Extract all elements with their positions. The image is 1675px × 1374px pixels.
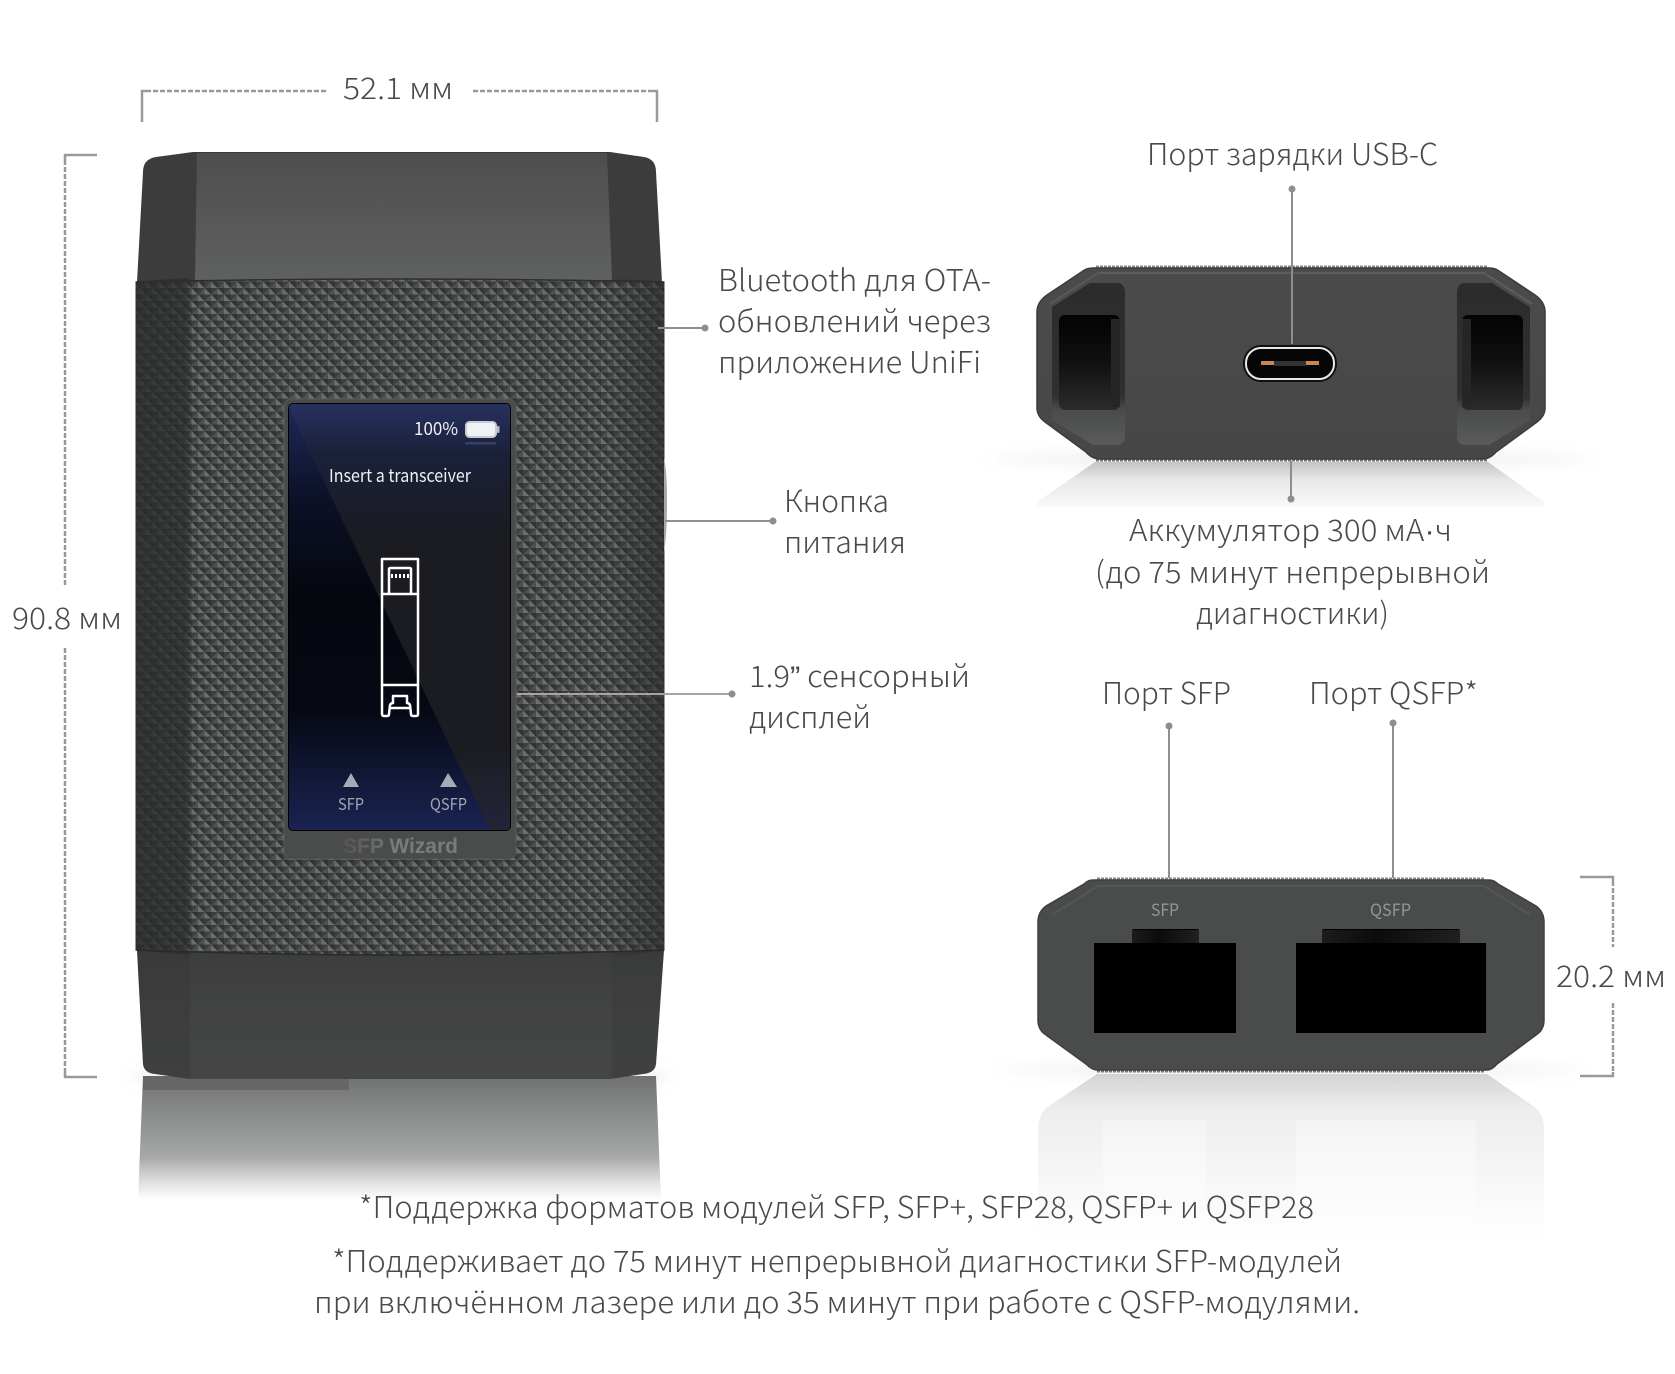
reflection [991, 456, 1591, 507]
callout: SFP port [1102, 669, 1231, 878]
callout: Bluetooth: приложение UniFi [718, 338, 981, 382]
callout: USB-C charging port [1147, 130, 1438, 344]
SFP arrow label [338, 773, 364, 815]
callout: QSFP port [1309, 669, 1478, 878]
battery status [414, 415, 500, 444]
panel: bottom edge view with USB-C [991, 267, 1591, 507]
QSFP arrow label [430, 773, 467, 815]
footnotes: *Поддерживает до 75 минут непрерывной диагностики SFP-модулей [332, 1237, 1342, 1281]
dimension: height 90.8 мм: 90.8 мм [12, 594, 122, 638]
prompt text: Insert a transceiver [329, 462, 472, 488]
bevel highlight [1098, 273, 1532, 304]
panel: main device front view [130, 152, 670, 1200]
callout: USB-C charging port: Порт зарядки USB-C [1147, 130, 1438, 174]
display bezel [284, 399, 516, 859]
footnotes: *Поддержка форматов модулей SFP, SFP+, SFP28, QSFP+ и QSFP28 [359, 1183, 1314, 1227]
battery status: 100% [414, 415, 458, 441]
top cap [137, 152, 662, 282]
callout: battery: Аккумулятор 300 мА ·ч [1129, 506, 1452, 550]
callout: SFP port: Порт SFP [1102, 669, 1231, 713]
callout: QSFP port: Порт QSFP* [1309, 669, 1478, 713]
SFP port: SFP [1151, 896, 1179, 921]
callout: power button: питания [784, 518, 906, 562]
icon: SFP transceiver [382, 559, 418, 716]
dimension: depth 20.2 мм: 20.2 мм [1556, 952, 1666, 996]
QSFP port: QSFP [1370, 896, 1411, 921]
right pocket [1457, 283, 1530, 445]
USB-C port [1243, 345, 1337, 382]
dimension: width 52.1 мм [142, 64, 657, 122]
footnotes: при включённом лазере или до 35 минут при работе с QSFP-модулями. [314, 1278, 1360, 1322]
panel: top edge view with ports [1001, 879, 1581, 1240]
product name SFP Wizard: SFP Wizard [343, 835, 458, 858]
SFP port [1094, 896, 1236, 1033]
device reflection [130, 1071, 670, 1200]
callout: power button: Кнопка [784, 477, 889, 521]
reflection [1001, 1067, 1581, 1240]
QSFP port [1296, 896, 1486, 1033]
texture strips [1097, 878, 1485, 880]
QSFP arrow label: QSFP [430, 791, 467, 815]
touch screen [288, 403, 511, 831]
callout: battery [1095, 461, 1490, 633]
callout: battery: диагностики) [1196, 589, 1389, 633]
knurled grip [136, 278, 664, 957]
power button bump [664, 458, 667, 552]
left pocket [1052, 283, 1125, 445]
callout: power button [665, 477, 906, 562]
bevel highlight [1052, 886, 1530, 915]
dimension: width 52.1 мм: 52.1 мм [343, 64, 453, 108]
callout: Bluetooth: обновлений через [718, 297, 991, 341]
bottom cap [137, 950, 664, 1079]
callout: touch display: дисплей [749, 693, 871, 737]
footnotes [314, 1183, 1360, 1322]
dimension: depth 20.2 мм [1556, 877, 1666, 1076]
callout: Bluetooth [658, 256, 991, 382]
SFP arrow label: SFP [338, 791, 364, 815]
callout: battery: (до 75 минут непрерывной [1095, 548, 1490, 592]
body [1038, 880, 1544, 1070]
callout: touch display [517, 652, 970, 737]
texture strips [1096, 266, 1488, 268]
dimension: height 90.8 мм [12, 155, 122, 1077]
body [1037, 268, 1545, 459]
callout: Bluetooth: Bluetooth для OTA- [718, 256, 991, 300]
callout: touch display: 1.9” сенсорный [749, 652, 970, 696]
